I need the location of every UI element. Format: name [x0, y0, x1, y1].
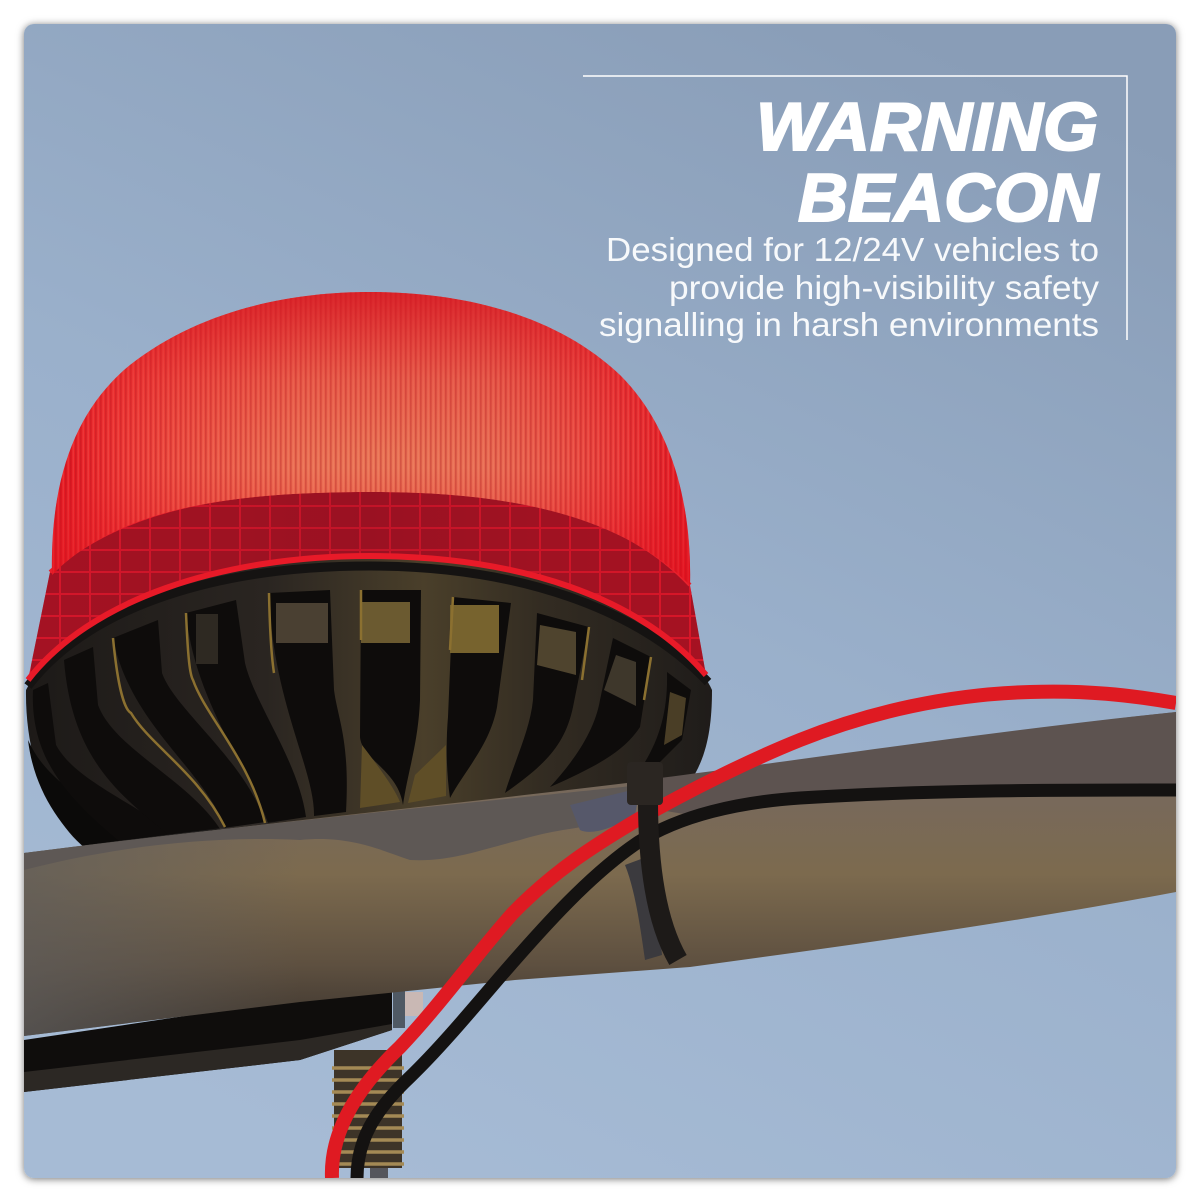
red lens dome [52, 292, 690, 585]
left pole grey tone [24, 825, 246, 1036]
title: BEACON [798, 160, 1100, 236]
mounting bracket [24, 985, 423, 1092]
red lens band [28, 488, 706, 680]
description text: signalling in harsh environments [599, 306, 1099, 343]
title [756, 89, 1100, 236]
title: WARNING [756, 89, 1098, 165]
description text: provide high-visibility safety [669, 269, 1100, 306]
red cable [332, 692, 1176, 1178]
sunlit window panels [196, 602, 686, 745]
lower base shadow [28, 740, 118, 846]
base body [26, 556, 712, 848]
photo scene [24, 292, 1176, 1178]
worn paint patch [24, 785, 640, 870]
description text [599, 231, 1100, 343]
dark curved wells between fins [33, 590, 691, 842]
beacon black base [26, 556, 712, 848]
cable tie [627, 762, 678, 960]
threaded bolt [332, 1050, 404, 1178]
right pole upper tone [660, 712, 1176, 815]
heading frame line [583, 76, 1127, 340]
sunlit base feet [360, 745, 446, 808]
black ring under lens [28, 566, 708, 686]
tie shadow on pole [625, 855, 662, 960]
description text: Designed for 12/24V vehicles to [606, 231, 1099, 268]
gold fin highlights [113, 590, 651, 827]
black cable [357, 790, 1176, 1178]
horizontal pole [24, 712, 1176, 1036]
